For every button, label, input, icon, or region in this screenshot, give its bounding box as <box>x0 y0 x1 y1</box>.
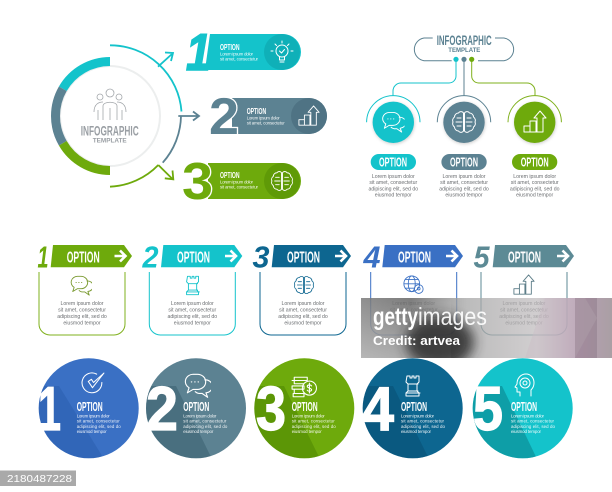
long shadow <box>38 386 104 459</box>
disc <box>254 358 354 458</box>
panel: option 3 banner <box>182 153 301 211</box>
body text: eiusmod tempor <box>505 320 543 326</box>
heading: OPTION <box>183 400 209 414</box>
number: 5 <box>473 375 503 444</box>
icon disc <box>291 98 327 134</box>
tree item 1 <box>367 96 420 198</box>
icon: growth chart <box>524 110 546 132</box>
body text: Lorem ipsum dolor <box>392 301 435 307</box>
heading: OPTION <box>511 400 537 414</box>
icon: speech bubbles <box>70 276 92 296</box>
icon: growth chart <box>513 274 534 295</box>
image id tag <box>0 470 76 486</box>
panel: tree diagram <box>367 33 561 198</box>
body text: eiusmod tempor <box>284 320 322 326</box>
body text: Lorem ipsum dolor <box>77 413 110 418</box>
icon disc <box>264 163 300 199</box>
arrow icon <box>335 250 346 262</box>
backdrop <box>361 298 612 358</box>
banner bar <box>205 34 301 70</box>
body text: Lorem ipsum dolor <box>503 301 546 307</box>
header bracket <box>414 38 514 61</box>
body text: adipiscing elit, sed do <box>510 186 560 192</box>
icon: speech bubbles <box>382 112 404 132</box>
body text: Lorem ipsum dolor <box>220 52 254 56</box>
body text: Lorem ipsum dolor <box>220 180 254 184</box>
body text: sit amet, consectetur <box>279 308 327 314</box>
card 1 <box>38 239 132 335</box>
number: 2 <box>142 239 158 274</box>
icon: speech bubbles <box>184 374 211 398</box>
body text: sit amet, consectetur <box>247 120 285 126</box>
pill label: OPTION <box>521 155 549 170</box>
outline box <box>149 272 235 335</box>
body text: eiusmod tempor <box>63 320 101 326</box>
body text: sit amet, consectetur <box>369 180 417 186</box>
panel: option 1 banner <box>186 24 301 82</box>
outline box <box>260 272 346 335</box>
body text: adipiscing elit, sed do <box>77 424 121 429</box>
label: OPTION <box>398 249 431 266</box>
body text: sit amet, consectetur <box>168 308 216 314</box>
label: OPTION <box>508 249 541 266</box>
watermark wordmark: images <box>418 303 487 331</box>
arc <box>508 96 561 122</box>
body text: Lorem ipsum dolor <box>247 116 280 120</box>
card 2 <box>142 239 242 335</box>
centre white disc <box>60 66 160 166</box>
heading: OPTION <box>401 400 427 414</box>
body text: Lorem ipsum dolor <box>443 174 486 180</box>
body text: adipiscing elit, sed do <box>511 424 556 429</box>
number: 3 <box>256 375 286 444</box>
heading: OPTION <box>220 43 240 52</box>
pill <box>441 154 487 170</box>
body text: adipiscing elit, sed do <box>439 186 489 192</box>
number: 3 <box>182 153 213 211</box>
number: 3 <box>252 239 270 274</box>
body text: Lorem ipsum dolor <box>401 413 435 418</box>
pill label: OPTION <box>379 155 407 170</box>
body text: sit amet, consectetur <box>220 184 259 190</box>
body text: Lorem ipsum dolor <box>372 174 415 180</box>
body text: sit amet, consectetur <box>401 419 445 424</box>
arrow banner <box>272 245 351 267</box>
body text: adipiscing elit, sed do <box>368 186 418 192</box>
body text: sit amet, consectetur <box>511 180 559 186</box>
icon: check mark <box>82 372 104 394</box>
body text: Lorem ipsum dolor <box>282 301 325 307</box>
banner bar <box>232 98 327 134</box>
number: 2 <box>209 88 239 146</box>
arrow icon <box>446 250 457 262</box>
icon: brain <box>271 171 293 191</box>
body text: eiusmod tempor <box>445 192 483 198</box>
arrow: green <box>110 165 173 187</box>
disc shadow <box>373 103 414 144</box>
segmented ring <box>55 62 110 170</box>
body text: Lorem ipsum dolor <box>183 413 217 418</box>
arrow banner <box>493 245 574 267</box>
body text: adipiscing elit, sed do <box>499 314 549 320</box>
body text: eiusmod tempor <box>395 320 433 326</box>
number: 2 <box>146 375 178 444</box>
body text: adipiscing elit, sed do <box>183 424 228 429</box>
body text: Lorem ipsum dolor <box>61 301 104 307</box>
icon: coins <box>292 376 317 398</box>
arc <box>437 96 491 122</box>
icon: growth chart <box>298 105 320 126</box>
card 3 <box>252 239 351 335</box>
disc <box>146 358 246 458</box>
disc <box>514 102 555 143</box>
long shadow <box>362 386 429 459</box>
body text: eiusmod tempor <box>511 429 542 434</box>
circle 4 <box>362 358 463 459</box>
long shadow <box>146 386 212 459</box>
pill <box>512 154 557 170</box>
body text: eiusmod tempor <box>183 429 214 434</box>
heading: OPTION <box>77 400 103 414</box>
icon disc <box>264 34 300 70</box>
icon: brain <box>294 276 314 294</box>
body text: sit amet, consectetur <box>77 419 120 424</box>
arrow icon <box>114 250 126 262</box>
body text: eiusmod tempor <box>375 192 412 198</box>
circle 5 <box>472 358 573 459</box>
number: 1 <box>38 239 48 274</box>
body text: adipiscing elit, sed do <box>278 314 328 320</box>
disc shadow <box>514 103 556 144</box>
icon: globe with pin <box>403 276 424 294</box>
watermark banner <box>361 298 612 358</box>
body text: sit amet, consectetur <box>183 419 227 424</box>
banner bar <box>208 163 301 199</box>
long shadow <box>254 386 320 459</box>
watermark wordmark: getty <box>373 303 418 331</box>
pill label: OPTION <box>450 155 478 170</box>
connectors <box>393 59 535 96</box>
body text: sit amet, consectetur <box>511 419 555 424</box>
centre subtitle: TEMPLATE <box>93 138 127 145</box>
heading: OPTION <box>220 171 240 180</box>
label: OPTION <box>287 249 320 266</box>
icon: light bulb <box>270 40 294 62</box>
arrow banner <box>51 245 132 267</box>
card 5 <box>474 239 574 335</box>
body text: eiusmod tempor <box>516 192 554 198</box>
card 4 <box>363 239 463 335</box>
body text: adipiscing elit, sed do <box>401 424 446 429</box>
outline box <box>371 272 457 335</box>
body text: eiusmod tempor <box>401 429 432 434</box>
pill <box>371 154 416 170</box>
arrow icon <box>225 250 236 262</box>
arrow banner <box>161 245 242 267</box>
arrow: teal <box>110 45 182 112</box>
body text: adipiscing elit, sed do <box>167 314 217 320</box>
number: 4 <box>362 375 394 444</box>
heading: OPTION <box>292 400 318 414</box>
long shadow <box>472 386 537 459</box>
body text: sit amet, consectetur <box>390 308 438 314</box>
disc <box>39 358 139 458</box>
number: 1 <box>186 24 211 82</box>
centre title: INFOGRAPHIC <box>81 124 139 138</box>
circle 3 <box>254 358 354 459</box>
body text: sit amet, consectetur <box>440 180 488 186</box>
label: OPTION <box>67 249 100 266</box>
label: OPTION <box>177 249 210 266</box>
connector dots <box>453 57 474 62</box>
arrow icon <box>557 250 568 262</box>
body text: sit amet, consectetur <box>220 56 259 62</box>
body text: sit amet, consectetur <box>292 419 335 424</box>
watermark credit: Credit: artvea <box>373 333 461 348</box>
body text: eiusmod tempor <box>77 429 107 434</box>
number: 5 <box>474 239 490 274</box>
tag number: 2180487228 <box>7 473 72 485</box>
panel: option 2 banner <box>209 88 327 146</box>
outline box <box>481 272 567 335</box>
disc shadow <box>444 103 485 144</box>
circle 2 <box>146 358 246 459</box>
icon: brain <box>452 111 476 133</box>
number: 4 <box>363 239 380 274</box>
disc <box>443 102 485 143</box>
body text: adipiscing elit, sed do <box>292 424 336 429</box>
body text: sit amet, consectetur <box>500 308 548 314</box>
body text: Lorem ipsum dolor <box>171 301 214 307</box>
header subtitle: TEMPLATE <box>448 48 480 54</box>
body text: Lorem ipsum dolor <box>513 174 556 180</box>
icon: chess rook <box>406 376 420 396</box>
body text: eiusmod tempor <box>292 429 322 434</box>
body text: adipiscing elit, sed do <box>57 314 107 320</box>
arrow: slate <box>163 112 199 163</box>
tree item 2 <box>437 96 491 198</box>
tree item 3 <box>508 96 561 198</box>
body text: Lorem ipsum dolor <box>511 413 545 418</box>
arc <box>367 96 420 122</box>
body text: Lorem ipsum dolor <box>292 413 325 418</box>
outline box <box>39 272 125 335</box>
heading: OPTION <box>247 107 266 116</box>
body text: adipiscing elit, sed do <box>389 314 439 320</box>
header title: INFOGRAPHIC <box>437 33 492 48</box>
icon: head with gear <box>514 374 534 396</box>
disc <box>373 102 414 143</box>
disc <box>363 358 463 458</box>
body text: eiusmod tempor <box>174 320 211 326</box>
number: 1 <box>38 375 61 444</box>
disc <box>473 358 573 458</box>
body text: sit amet, consectetur <box>58 308 106 314</box>
arrow banner <box>382 245 463 267</box>
icon: people <box>94 89 126 120</box>
circle 1 <box>38 358 139 459</box>
icon: chess rook <box>186 276 200 296</box>
panel: circular three-option diagram <box>55 45 199 187</box>
tag background <box>0 470 76 486</box>
